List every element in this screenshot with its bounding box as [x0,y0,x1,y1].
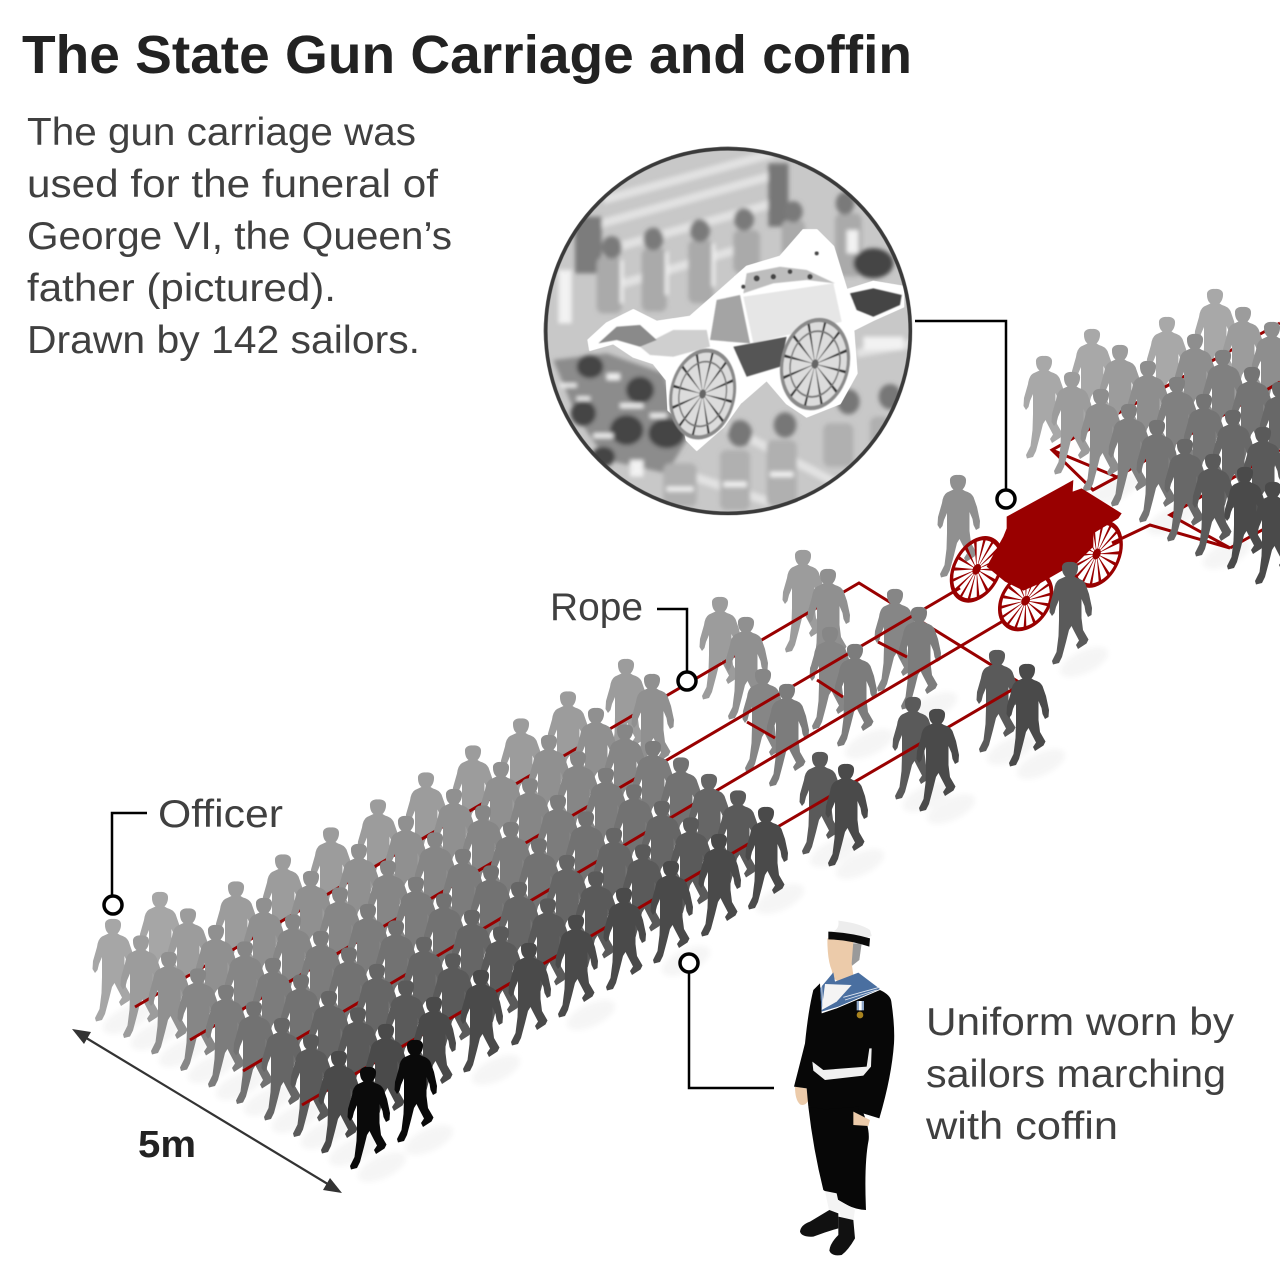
carriage cut-out with white outline [588,230,903,450]
right file 7 [1224,467,1280,584]
uniform label: Uniform worn by [926,1001,1235,1044]
file 7 sailors [290,650,1019,1137]
medal [857,1001,864,1018]
hair [848,943,862,967]
intro text block [27,111,452,362]
white belt [812,1048,872,1080]
officer callout: Officer [158,793,283,836]
file 1 sailors [120,550,825,1038]
right file 4 [1136,367,1274,522]
intro text block: father (pictured). [27,267,336,310]
blue collar [820,972,880,1012]
gun carriage silhouette [941,480,1131,639]
gun carriage callout line [915,321,1015,508]
intro text block: The gun carriage was [27,111,416,154]
front left wheel [941,530,1012,609]
width arrow: 5m [72,1029,342,1193]
carriage body [987,480,1122,591]
hands [795,1087,870,1126]
face and neck [827,938,853,984]
file 2 sailors [148,569,850,1054]
right file 0 [1024,289,1237,458]
uniform label: with coffin [925,1105,1118,1148]
socks [825,1191,855,1222]
title: The State Gun Carriage and coffin [22,25,912,85]
right file 2 [1080,322,1280,492]
white bib [822,984,852,1010]
rope callout [550,586,696,690]
right file 3 [1108,350,1245,506]
rope B [190,588,960,1040]
officer callout [104,793,283,914]
rear right wheel [1063,515,1131,593]
photo inset: George VI funeral [540,140,920,520]
trousers [808,1105,869,1210]
intro text block: used for the funeral of [27,163,438,206]
rope A with front diagonal [135,583,1022,1007]
right rope 3 [1112,450,1280,548]
photo content [540,140,920,520]
flanking officer in front of carriage [1050,562,1092,664]
file 8 sailors [318,664,1049,1154]
right file 1 [1052,307,1265,474]
right-hand sailors block with ropes [1024,289,1280,584]
file 5 sailors [234,757,703,1104]
marching formation rear block with ropes [92,550,1049,1170]
ground shadows [99,468,1255,1188]
photo ring [546,149,910,513]
rope D [302,684,1022,1105]
rope C and cross pieces [243,621,1003,1071]
collar stripes [822,986,879,1007]
jacket [794,983,894,1118]
file 4 sailors [206,607,941,1088]
file 0 sailors [92,892,182,1022]
rope callout: Rope [550,586,643,629]
uniform callout line [680,954,774,1088]
flanking officer behind carriage [938,475,980,578]
uniform label: sailors marching [926,1053,1226,1096]
black officers [348,1040,437,1170]
width arrow: 5m: 5m [138,1124,196,1166]
right file 5 [1164,382,1280,542]
right file 6 [1192,427,1280,556]
large sailor uniform figure [794,921,894,1255]
intro text block: George VI, the Queen’s [27,215,452,258]
right rope 1 [1052,323,1280,490]
file 3 sailors [178,589,917,1071]
cap [828,921,872,947]
front right wheel [989,562,1062,639]
file 6 sailors [262,774,731,1120]
right rope 2 [1117,382,1280,477]
uniform label [925,1001,1235,1148]
shoes [800,1210,855,1255]
intro text block: Drawn by 142 sailors. [27,319,420,362]
